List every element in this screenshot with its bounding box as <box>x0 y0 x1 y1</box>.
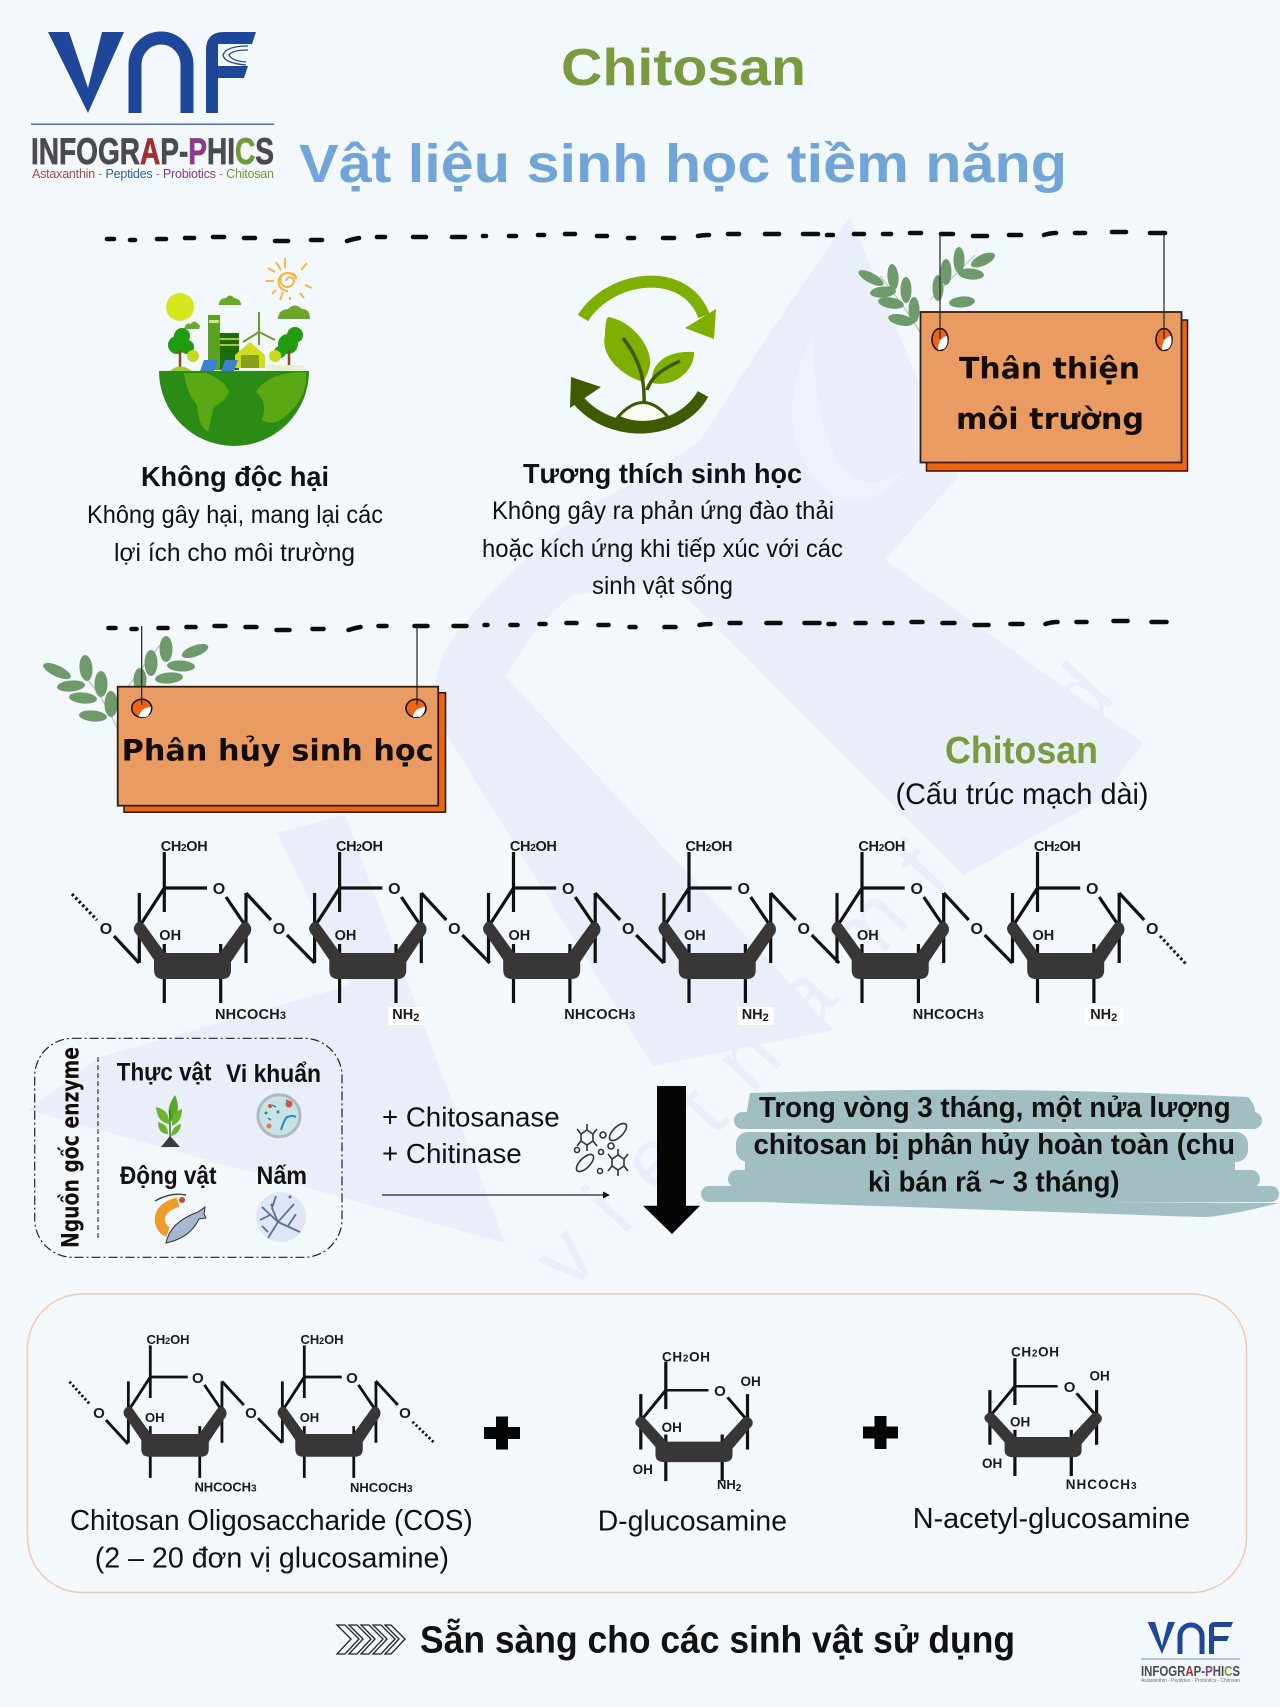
unit 5: O <box>910 881 923 898</box>
unit 4: CH2OH <box>685 839 732 855</box>
unit 2: OH <box>335 928 356 944</box>
chemical: COS: O <box>346 1370 358 1387</box>
icon: plant recycle <box>570 282 716 428</box>
heading: chitosan long chain: Chitosan <box>945 730 1098 772</box>
captions: (2 – 20 đơn vị glucosamine) <box>95 1543 449 1575</box>
chemical: COS: NHCOCH3 <box>350 1480 413 1495</box>
unit 3: NHCOCH3 <box>564 1007 635 1023</box>
divider: top rope <box>107 232 1165 241</box>
unit 6: O <box>1086 881 1098 898</box>
unit 2: CH2OH <box>336 839 383 855</box>
enzymes label: + Chitosanase <box>382 1102 560 1133</box>
unit 2: O <box>448 921 461 938</box>
unit 6: OH <box>1033 928 1054 944</box>
text block: biocompatible <box>482 458 843 600</box>
chemical: D-glucosamine: OH <box>740 1374 761 1389</box>
captions <box>70 1503 1190 1575</box>
unit 4: O <box>737 881 750 898</box>
logo: small <box>1141 1622 1240 1684</box>
unit 2: O <box>388 881 401 898</box>
unit 6: NH <box>1090 1007 1111 1023</box>
chemical: COS: OH <box>300 1410 319 1425</box>
logo: small: INFOGRAP-PHICS <box>1141 1663 1240 1680</box>
panel: degradation products <box>28 1294 1246 1592</box>
sign: biodegradable <box>41 626 445 812</box>
logo: small: Astaxanthin - Peptides - Probiotics - Chitosan <box>1141 1678 1240 1684</box>
icon: fungi <box>256 1192 306 1242</box>
chemical: COS: OH <box>145 1410 164 1425</box>
unit 3: O <box>622 921 634 938</box>
chemical: D-glucosamine: NH <box>717 1477 736 1492</box>
icon: bacteria dish <box>258 1095 300 1137</box>
unit 5: OH <box>857 928 879 944</box>
callout: half-life: kì bán rã ~ 3 tháng) <box>868 1167 1120 1199</box>
unit 3: OH <box>509 928 530 944</box>
unit 5: NHCOCH3 <box>913 1007 984 1023</box>
unit 3 <box>483 839 664 1023</box>
panel: enzyme sources <box>35 1038 342 1257</box>
unit 5: CH2OH <box>858 839 905 855</box>
text block: biocompatible: hoặc kích ứng khi tiếp xúc với các <box>482 535 843 563</box>
chemical: N-acetyl-glucosamine: O <box>1064 1379 1076 1396</box>
hole right <box>1156 328 1172 350</box>
chemical: COS: O <box>93 1405 105 1422</box>
unit 4 <box>658 839 839 1025</box>
callout: half-life <box>701 1090 1279 1217</box>
hole left <box>132 699 152 717</box>
chemical: COS: O <box>399 1405 411 1422</box>
unit 1: CH2OH <box>161 839 208 855</box>
icon: plant <box>156 1095 182 1147</box>
sign: eco friendly <box>856 234 1188 471</box>
text block: non-toxic: Không độc hại <box>141 461 329 492</box>
heading: chitosan long chain: (Cấu trúc mạch dài) <box>896 778 1148 811</box>
plus sign 2 <box>863 1416 898 1449</box>
chemical: D-glucosamine: CH2OH <box>662 1350 710 1365</box>
chemical: N-acetyl-glucosamine <box>982 1345 1137 1492</box>
chemical: COS: CH2OH <box>300 1332 344 1347</box>
chemical: N-acetyl-glucosamine: OH <box>1010 1415 1030 1430</box>
heading: chitosan long chain <box>896 730 1148 811</box>
text block: biocompatible: Không gây ra phản ứng đào thải <box>492 497 834 525</box>
logo: VNF infographics: Astaxanthin - Peptides - Probiotics - Chitosan <box>32 167 274 181</box>
unit 4: O <box>797 921 810 938</box>
sign: eco friendly: môi trường <box>956 402 1144 436</box>
unit 1: O <box>273 921 285 938</box>
icon: green earth <box>159 258 312 446</box>
captions: N-acetyl-glucosamine <box>913 1503 1190 1535</box>
chemical: COS: NHCOCH3 <box>194 1480 257 1495</box>
panel: enzyme sources: Nấm <box>256 1162 307 1190</box>
unit 5: O <box>970 921 983 938</box>
unit 3: CH2OH <box>510 839 557 855</box>
hole left <box>932 328 948 350</box>
unit 1: OH <box>159 928 181 944</box>
enzymes label <box>382 1102 560 1169</box>
chemical: COS <box>70 1332 434 1495</box>
label: enzyme origin: Nguồn gốc enzyme <box>56 1047 84 1248</box>
unit 6: CH2OH <box>1034 839 1081 855</box>
unit 5 <box>832 839 1012 1023</box>
unit 2: 2 <box>413 1012 419 1024</box>
callout: half-life: chitosan bị phân hủy hoàn toàn (chu <box>754 1129 1235 1161</box>
watermark logo: vietnamfood <box>512 645 1131 1306</box>
leaves <box>856 247 997 332</box>
logo: VNF infographics <box>31 32 274 181</box>
unit 6 <box>1007 839 1158 1025</box>
sign: eco friendly: Thân thiện <box>959 352 1140 386</box>
chemical: D-glucosamine: OH <box>662 1420 682 1435</box>
chemical: COS: O <box>245 1405 257 1422</box>
footer conclusion: Sẵn sàng cho các sinh vật sử dụng <box>420 1618 1015 1662</box>
unit 6: 2 <box>1111 1012 1117 1024</box>
unit 2 <box>309 839 490 1025</box>
subtitle: Vật liệu sinh học tiềm năng <box>299 134 1067 194</box>
chemical structure: chitosan chain <box>72 839 1186 1025</box>
divider: middle rope <box>108 621 1166 630</box>
hole right <box>406 699 426 717</box>
unit 1: NHCOCH3 <box>215 1007 286 1023</box>
unit 3: O <box>562 881 574 898</box>
chemical: N-acetyl-glucosamine: NHCOCH3 <box>1066 1477 1137 1492</box>
unit 6: O <box>1146 921 1158 938</box>
panel: enzyme sources: Thực vật <box>117 1059 212 1087</box>
icon: shrimp and fish <box>155 1194 206 1243</box>
enzymes label: + Chitinase <box>382 1138 522 1169</box>
title: Chitosan <box>561 39 806 97</box>
chemical: N-acetyl-glucosamine: OH <box>982 1456 1002 1471</box>
text block: non-toxic: lợi ích cho môi trường <box>114 539 355 567</box>
chemical: D-glucosamine: 2 <box>736 1483 742 1494</box>
chemical structure: chitosan chain: O <box>100 921 112 938</box>
unit 1: O <box>213 881 225 898</box>
chemical: N-acetyl-glucosamine: OH <box>1090 1369 1110 1384</box>
callout: half-life: Trong vòng 3 tháng, một nửa lượng <box>759 1092 1231 1124</box>
watermark logo <box>28 217 1143 1306</box>
arrow: big down <box>643 1086 700 1234</box>
unit 2: NH <box>392 1007 413 1023</box>
icon: chevrons <box>337 1625 405 1654</box>
chemical: N-acetyl-glucosamine: CH2OH <box>1011 1345 1059 1360</box>
arrow: enzymes <box>382 1192 610 1198</box>
unit 4: 2 <box>763 1012 769 1024</box>
chemical: D-glucosamine: OH <box>633 1462 653 1477</box>
unit 4: NH <box>742 1007 763 1023</box>
panel: enzyme sources: Vi khuẩn <box>226 1060 321 1088</box>
chemical: D-glucosamine <box>633 1350 761 1494</box>
captions: D-glucosamine <box>598 1506 787 1538</box>
text block: non-toxic <box>87 461 383 567</box>
unit 4: OH <box>684 928 706 944</box>
chemical: COS: CH2OH <box>146 1332 190 1347</box>
leaves <box>41 636 210 730</box>
text block: non-toxic: Không gây hại, mang lại các <box>87 501 383 529</box>
plus sign 1 <box>484 1416 520 1450</box>
sign: biodegradable: Phân hủy sinh học <box>122 734 434 768</box>
text block: biocompatible: sinh vật sống <box>592 572 733 600</box>
logo: VNF infographics: INFOGRAP-PHICS <box>31 131 274 172</box>
icon: enzyme molecules <box>574 1121 629 1176</box>
panel: enzyme sources: Động vật <box>120 1162 217 1190</box>
captions: Chitosan Oligosaccharide (COS) <box>70 1505 473 1537</box>
text block: biocompatible: Tương thích sinh học <box>523 458 802 489</box>
chemical: COS: O <box>192 1370 204 1387</box>
unit 1 <box>134 839 314 1023</box>
chemical: D-glucosamine: O <box>714 1383 726 1400</box>
